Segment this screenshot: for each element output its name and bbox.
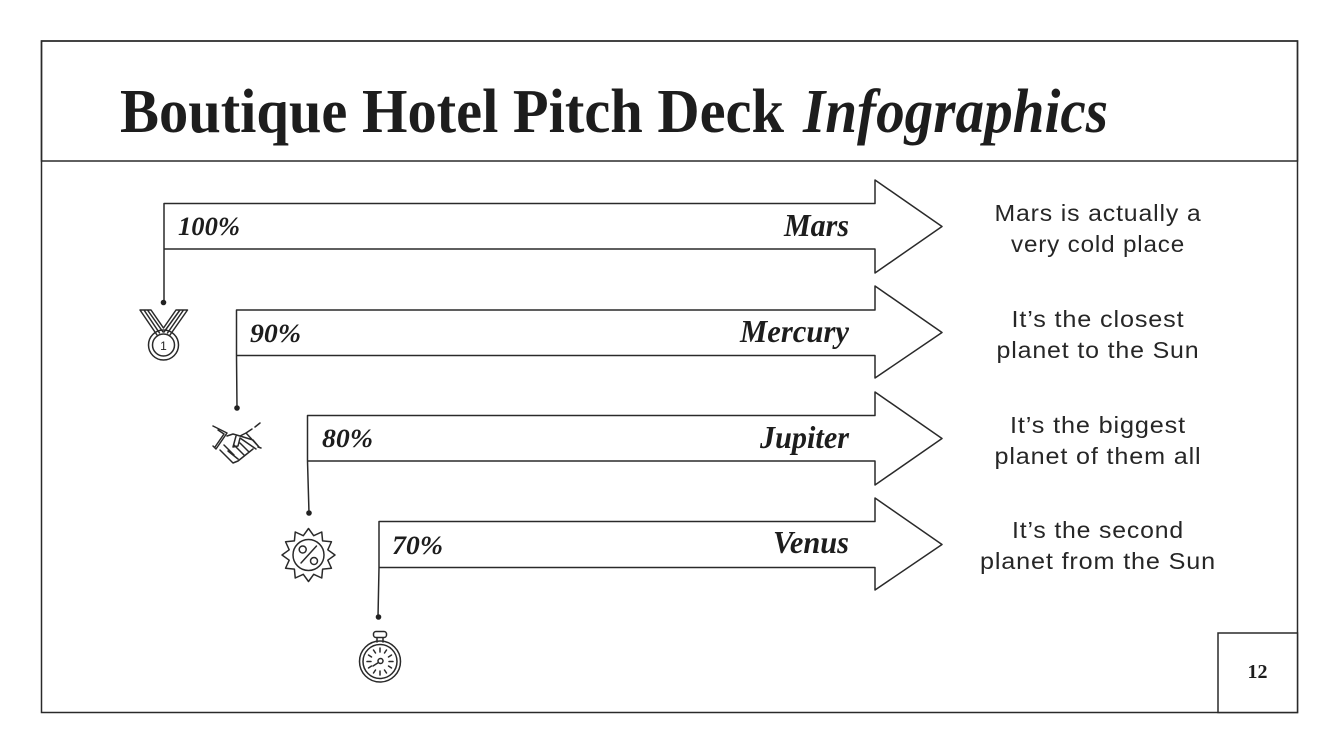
description: Jupiter: planet of them all: [994, 443, 1202, 469]
arrow: Jupiter: [308, 392, 942, 513]
description: Mars: [994, 200, 1202, 257]
title: Boutique Hotel Pitch Deck: [120, 78, 784, 146]
percent: 70%: 70%: [392, 531, 443, 560]
page number: 12: [1248, 661, 1268, 683]
panel: Mars row: [140, 180, 1202, 360]
icon: medal: 1: [160, 339, 167, 353]
description: Mars: very cold place: [1011, 231, 1185, 257]
description: Mars: Mars is actually a: [994, 200, 1202, 226]
label: Mars: Mars: [783, 207, 849, 243]
label: Jupiter: Jupiter: [759, 419, 850, 455]
arrow: Venus: [378, 498, 942, 617]
icon: percent badge: [282, 528, 335, 582]
label: Venus: Venus: [773, 524, 849, 560]
description: Mercury: planet to the Sun: [996, 337, 1200, 363]
connector dot: [234, 405, 240, 411]
connector dot: [306, 510, 312, 516]
label: Mercury: Mercury: [739, 313, 850, 349]
arrow: Mercury: [236, 286, 942, 408]
title: Infographics: [802, 78, 1108, 146]
description: Venus: planet from the Sun: [980, 548, 1216, 574]
icon: handshake: [213, 423, 261, 463]
panel: Venus row: [360, 498, 1216, 682]
description: Mercury: [996, 306, 1200, 363]
description: Venus: It’s the second: [1012, 517, 1184, 543]
percent: 90%: 90%: [250, 319, 301, 348]
connector dot: [161, 300, 166, 305]
description: Mercury: It’s the closest: [1012, 306, 1184, 332]
arrow: Mars: [164, 180, 942, 303]
title: [42, 41, 1298, 161]
description: Jupiter: [994, 412, 1202, 469]
icon: medal: [140, 310, 188, 360]
percent: 100%: 100%: [178, 212, 240, 241]
panel: Mercury row: [213, 286, 1200, 463]
icon: stopwatch: [360, 632, 400, 682]
page number: [1218, 633, 1298, 712]
description: Venus: [980, 517, 1216, 574]
percent: 80%: 80%: [322, 424, 373, 453]
panel: Jupiter row: [282, 392, 1202, 582]
connector dot: [376, 614, 381, 620]
description: Jupiter: It’s the biggest: [1010, 412, 1186, 438]
